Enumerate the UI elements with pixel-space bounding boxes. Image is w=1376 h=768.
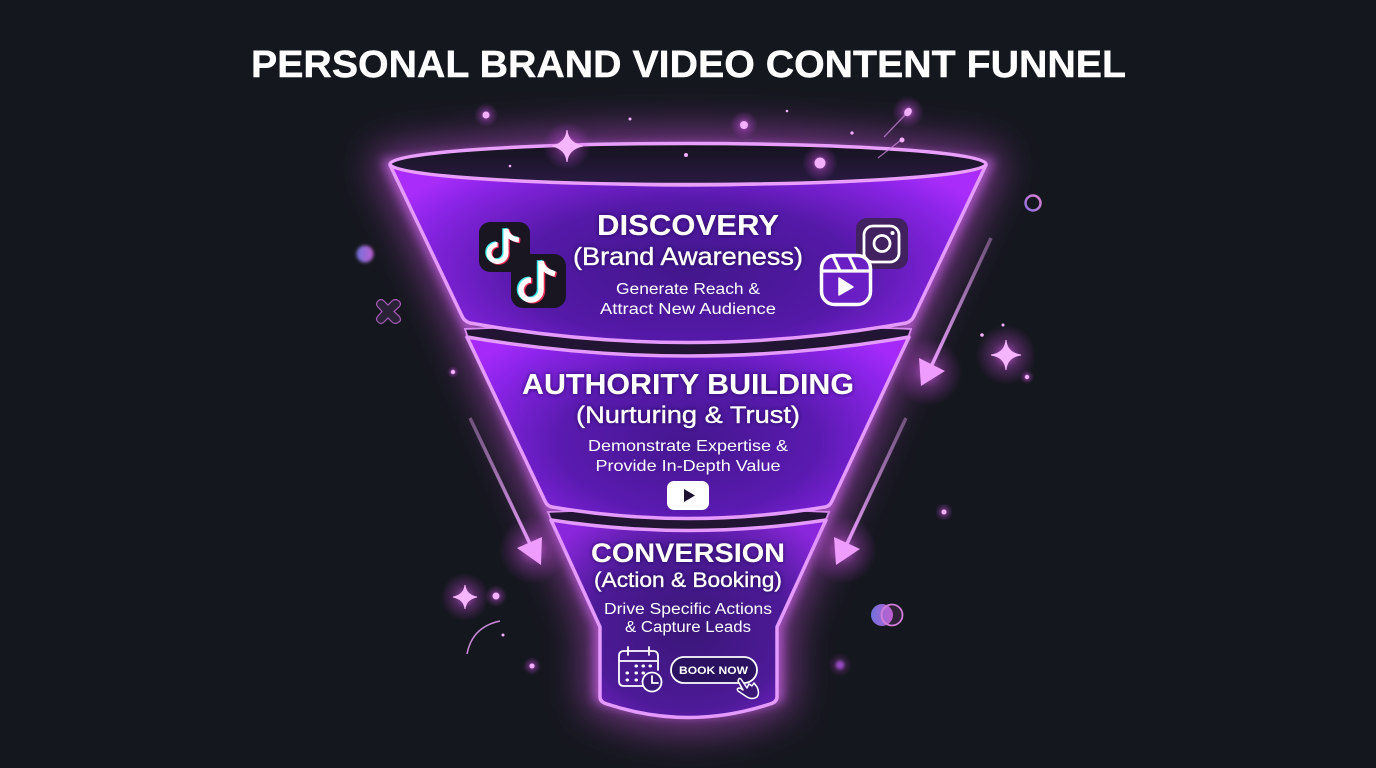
- funnel outer glow: [390, 145, 986, 716]
- discovery description: Generate Reach &: [616, 281, 761, 298]
- comet: lower: [878, 138, 904, 158]
- decoration: purple glow dot: [828, 653, 852, 677]
- conversion description: & Capture Leads: [625, 619, 751, 636]
- icon: instagram: [856, 218, 908, 269]
- funnel section: conversion: [548, 508, 829, 718]
- decoration: ring: [1026, 196, 1040, 210]
- authority description: [588, 438, 788, 475]
- icon: tiktok lower: [511, 254, 566, 308]
- sparkle: lower left: [441, 573, 489, 621]
- authority back rim: [465, 324, 911, 358]
- conversion body: [551, 520, 826, 718]
- arrow: upper right: [894, 238, 991, 406]
- book now button: [671, 657, 758, 698]
- conversion description: [604, 601, 772, 636]
- decoration: arc: [467, 621, 500, 654]
- icon: pointing hand: [737, 678, 758, 698]
- glowing particle halos: [447, 96, 1034, 675]
- particle dots: [451, 110, 1029, 668]
- icon: calendar with clock: [619, 647, 662, 692]
- discovery heading: DISCOVERY: [597, 210, 779, 242]
- discovery body: [390, 165, 986, 342]
- funnel section: discovery: [390, 144, 986, 342]
- discovery description: Attract New Audience: [600, 301, 776, 318]
- icon: tiktok upper: [479, 222, 530, 272]
- funnel top opening: [390, 144, 986, 184]
- decoration: blurred orb left: [356, 246, 374, 262]
- authority description: Demonstrate Expertise &: [588, 438, 788, 455]
- sparkles and particles: [441, 96, 1036, 675]
- decoration: outlined cross: [376, 300, 400, 324]
- conversion back rim: [548, 508, 829, 535]
- conversion description: Drive Specific Actions: [604, 601, 772, 618]
- icon: video play button: [667, 481, 709, 510]
- comet: upper: [884, 106, 913, 137]
- funnel section: authority building: [465, 324, 911, 518]
- icon: reels: [822, 256, 870, 304]
- discovery subheading: (Brand Awareness): [573, 243, 803, 271]
- discovery description: [600, 281, 776, 318]
- authority body: [467, 337, 909, 518]
- title: PERSONAL BRAND VIDEO CONTENT FUNNEL: [251, 44, 1126, 86]
- sparkle: funnel rim: [543, 122, 591, 170]
- conversion subheading: (Action & Booking): [594, 569, 782, 592]
- authority heading: AUTHORITY BUILDING: [522, 369, 854, 401]
- authority description: Provide In-Depth Value: [596, 458, 781, 475]
- arrow: lower left: [470, 418, 567, 584]
- sparkle: right: [976, 325, 1036, 385]
- decoration: overlapping circles: [871, 604, 902, 626]
- arrow: lower right: [809, 418, 906, 584]
- authority subheading: (Nurturing & Trust): [576, 402, 800, 429]
- conversion heading: CONVERSION: [591, 538, 785, 568]
- book now button: BOOK NOW: [679, 665, 749, 677]
